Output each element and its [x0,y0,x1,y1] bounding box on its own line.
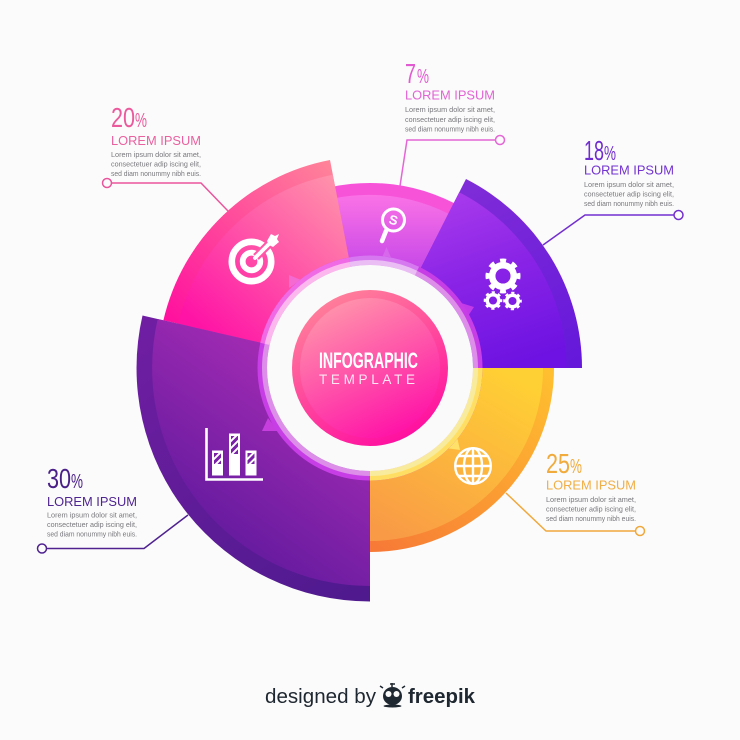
segment: 30% purple [137,316,370,602]
text block: 18%: sed diam nonummy nibh euis. [584,201,674,208]
text block: 18%: % [604,143,616,165]
text block: 25% [546,448,636,523]
segment: 18% violet [370,179,582,368]
text block: 20%: % [135,110,147,132]
text block: 18%: LOREM IPSUM [584,162,674,178]
footer credit [265,683,476,708]
text block: 25%: Lorem ipsum dolor sit amet, [546,497,636,504]
text block: 7%: % [417,66,429,88]
footer credit: freepik [408,686,476,708]
text block: 25%: % [570,456,582,478]
segment: 20% pink [163,160,370,368]
center ring [260,258,480,478]
icon: magnifier with dollar: S [387,212,400,228]
leader lines and end markers [38,136,683,553]
footer credit: designed by [265,686,376,708]
text block: 18% [584,135,674,208]
text block: 20%: consectetuer adip iscing elit, [111,162,201,168]
pointer triangles [262,247,474,450]
center circle with title [292,290,448,446]
center circle with title: TEMPLATE [319,372,415,387]
text block: 30% [47,463,137,538]
icon: magnifier with dollar [382,209,404,241]
text block: 7%: consectetuer adip iscing elit, [405,117,495,124]
text block: 20% [111,102,201,178]
text block: 7%: LOREM IPSUM [405,88,495,102]
text block: 7%: 7 [405,58,416,89]
text block: 25%: consectetuer adip iscing elit, [546,506,636,514]
text block: 20%: sed diam nonummy nibh euis. [111,171,201,178]
icon: bar chart [206,428,263,480]
text block: 25%: 25 [546,448,570,479]
text block: 30%: LOREM IPSUM [47,494,137,509]
text block: 20%: LOREM IPSUM [111,133,201,148]
text block: 25%: sed diam nonummy nibh euis. [546,516,636,523]
text block: 25%: LOREM IPSUM [546,478,636,492]
segment: 7% magenta [310,183,472,368]
text block: 7%: Lorem ipsum dolor sit amet, [405,107,495,114]
text block: 7%: sed diam nonummy nibh euis. [405,126,495,134]
text block: 30%: consectetuer adip iscing elit, [47,522,137,529]
segment: 25% orange [370,368,554,552]
text block: 18%: Lorem ipsum dolor sit amet, [584,182,674,189]
text block: 30%: Lorem ipsum dolor sit amet, [47,512,137,520]
text block: 20%: Lorem ipsum dolor sit amet, [111,152,201,159]
icon: target [232,234,279,281]
text block: 18%: 18 [584,135,604,166]
center circle with title: INFOGRAPHIC [319,348,418,373]
text block: 30%: % [71,471,83,493]
text block: 18%: consectetuer adip iscing elit, [584,192,674,198]
text block: 20%: 20 [111,102,135,133]
icon: globe [455,448,491,484]
icon: gears [485,260,521,309]
text block: 30%: 30 [47,463,71,494]
text block: 7% [405,58,495,134]
text block: 30%: sed diam nonummy nibh euis. [47,532,137,538]
